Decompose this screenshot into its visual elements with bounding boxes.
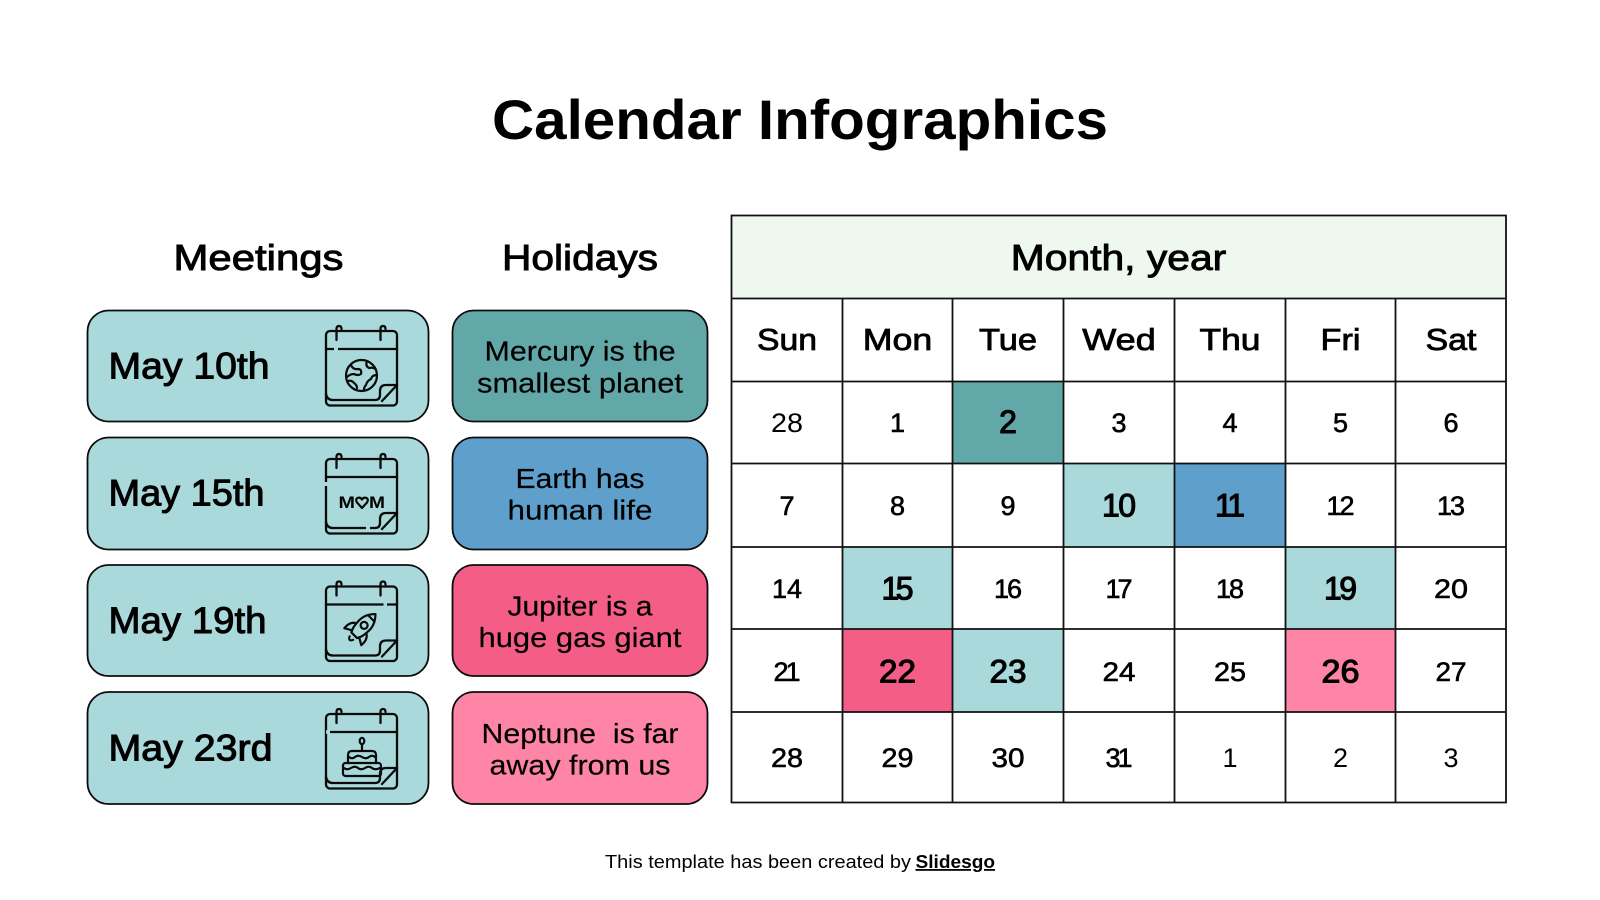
date numbers: 11 [1215,488,1245,524]
card: Earth: Earth has [516,463,644,494]
card: Neptune [452,692,708,804]
date numbers: 3 [1443,743,1459,773]
icon: calendar with cake [326,709,397,788]
date numbers: 15 [882,570,914,606]
card: May 19th: May 19th [108,600,266,641]
date numbers: 17 [1106,574,1132,604]
weekday labels: Wed [1082,322,1156,357]
card: May 10th [88,310,428,422]
footer credit: This template has been created by [605,852,911,872]
panel: holiday cards [452,310,708,804]
highlighted date cells [842,382,1396,712]
date numbers: 18 [1216,574,1244,604]
card: Mercury: Mercury is the [484,336,676,366]
weekday labels: Sat [1426,322,1477,357]
card: Mercury [452,310,708,422]
date numbers: 1 [1222,743,1238,773]
date numbers: 3 [1111,408,1127,438]
panel: meeting cards [88,310,428,804]
date numbers: 4 [1222,408,1238,438]
footer credit: Slidesgo [916,852,995,872]
date numbers: 2 [999,404,1017,440]
date numbers: 19 [1324,570,1357,606]
heading: holidays: Holidays [502,237,658,278]
icon: calendar with mom: M [369,493,385,512]
card: Mercury: smallest planet [477,368,683,398]
icon: calendar with mom: M [338,493,355,512]
date numbers: 31 [1106,743,1132,773]
calendar table [732,215,1506,802]
date numbers: 9 [1000,491,1016,521]
date numbers: 28 [771,408,803,438]
date numbers: 12 [1326,491,1354,521]
date numbers: 26 [1322,654,1360,690]
heading: meetings: Meetings [174,237,344,278]
date numbers: 8 [890,491,905,521]
card: May 23rd [88,692,428,804]
weekday labels: Fri [1320,322,1360,357]
date numbers: 23 [990,654,1026,690]
date numbers: 30 [992,743,1024,773]
date numbers: 24 [1102,657,1136,687]
date numbers: 14 [772,574,802,604]
card: May 23rd: May 23rd [108,728,272,768]
icon: calendar with rocket [326,582,397,661]
weekday labels: Mon [863,322,932,357]
weekday labels: Tue [979,322,1037,357]
date numbers: 16 [994,574,1022,604]
card: Neptune: Neptune is far [482,718,678,749]
date numbers: 2 [1333,743,1348,773]
card: May 15th [88,438,428,550]
card: Neptune: away from us [490,750,670,780]
card: Earth: human life [508,494,652,526]
date numbers: 21 [774,657,800,687]
card: May 15th: May 15th [108,472,264,514]
card: May 10th: May 10th [108,346,270,386]
date numbers: 28 [771,743,803,773]
card: Jupiter: huge gas giant [478,622,682,653]
date numbers: 13 [1437,491,1465,521]
month header: Month, year [1011,237,1226,278]
card: Earth [452,438,708,550]
date numbers: 10 [1102,488,1136,524]
card: Jupiter [452,565,708,676]
date numbers: 22 [879,654,916,690]
date numbers: 1 [890,408,905,438]
date numbers: 27 [1436,657,1466,687]
icon: calendar with globe [326,326,397,406]
weekday labels [757,322,1477,357]
title: Calendar Infographics [492,88,1108,151]
card: May 19th [88,565,428,676]
weekday labels: Sun [757,322,817,357]
date numbers: 5 [1333,408,1348,438]
weekday labels: Thu [1200,322,1260,357]
icon: calendar with mom [326,454,397,534]
date numbers: 6 [1443,408,1459,438]
date numbers: 20 [1434,574,1468,604]
card: Jupiter: Jupiter is a [508,590,653,622]
date numbers: 25 [1214,657,1246,687]
date numbers [771,404,1468,773]
date numbers: 29 [882,743,914,773]
date numbers: 7 [779,491,795,521]
month header [732,215,1506,298]
